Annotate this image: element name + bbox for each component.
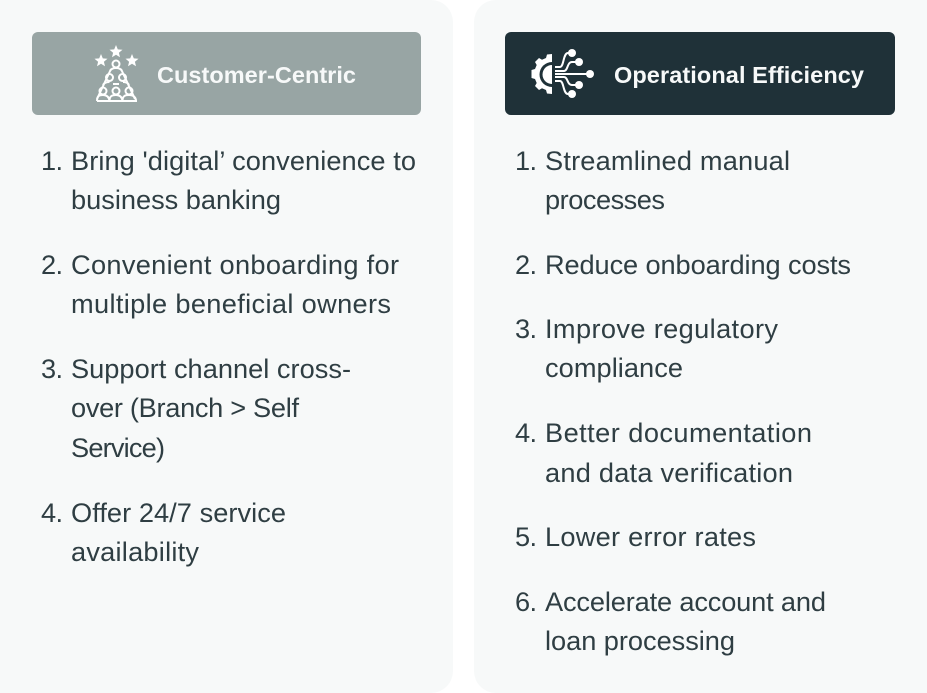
- item 1: [515, 145, 790, 215]
- item 3: 3.: [515, 313, 537, 344]
- header: customer-centric: [32, 32, 421, 115]
- item 1: Streamlined manual: [545, 145, 790, 176]
- item 1: processes: [545, 184, 665, 215]
- item 2: multiple beneficial owners: [71, 288, 391, 319]
- item 4: 4.: [515, 417, 537, 448]
- item 3: [41, 353, 351, 463]
- item 3: compliance: [545, 352, 683, 383]
- list: operational efficiency items: [515, 145, 851, 656]
- item 4: and data verification: [545, 457, 793, 488]
- item 1: 1.: [41, 145, 63, 176]
- item 5: Lower error rates: [545, 521, 756, 552]
- item 3: 3.: [41, 353, 63, 384]
- item 2: [41, 249, 399, 319]
- item 1: [41, 145, 416, 215]
- item 6: 6.: [515, 586, 537, 617]
- item 2: 2.: [515, 249, 537, 280]
- item 4: [515, 417, 812, 488]
- item 2: Convenient onboarding for: [71, 249, 399, 280]
- item 3: Support channel cross-: [71, 353, 351, 384]
- icon: gear with circuit nodes: [532, 49, 594, 98]
- item 1: 1.: [515, 145, 537, 176]
- item 3: over (Branch > Self: [71, 392, 299, 423]
- item 3: Improve regulatory: [545, 313, 778, 344]
- item 4: availability: [71, 536, 199, 567]
- panel: operational efficiency: [474, 0, 927, 693]
- header title: Operational Efficiency: [614, 62, 864, 88]
- item 1: business banking: [71, 184, 281, 215]
- item 5: 5.: [515, 521, 537, 552]
- header title: Customer-Centric: [157, 62, 356, 88]
- item 4: Offer 24/7 service: [71, 497, 286, 528]
- item 2: Reduce onboarding costs: [545, 249, 851, 280]
- item 4: [41, 497, 286, 567]
- item 6: loan processing: [545, 625, 735, 656]
- item 1: Bring 'digital’ convenience to: [71, 145, 416, 176]
- item 4: Better documentation: [545, 417, 812, 448]
- item 2: 2.: [41, 249, 63, 280]
- item 4: 4.: [41, 497, 63, 528]
- icon: people pyramid with stars: [94, 45, 138, 101]
- item 6: [515, 586, 826, 656]
- item 3: Service): [71, 432, 165, 463]
- panel: customer-centric: [0, 0, 453, 693]
- header: operational efficiency: [505, 32, 895, 115]
- item 3: [515, 313, 778, 383]
- list: customer-centric items: [41, 145, 416, 567]
- item 6: Accelerate account and: [545, 586, 826, 617]
